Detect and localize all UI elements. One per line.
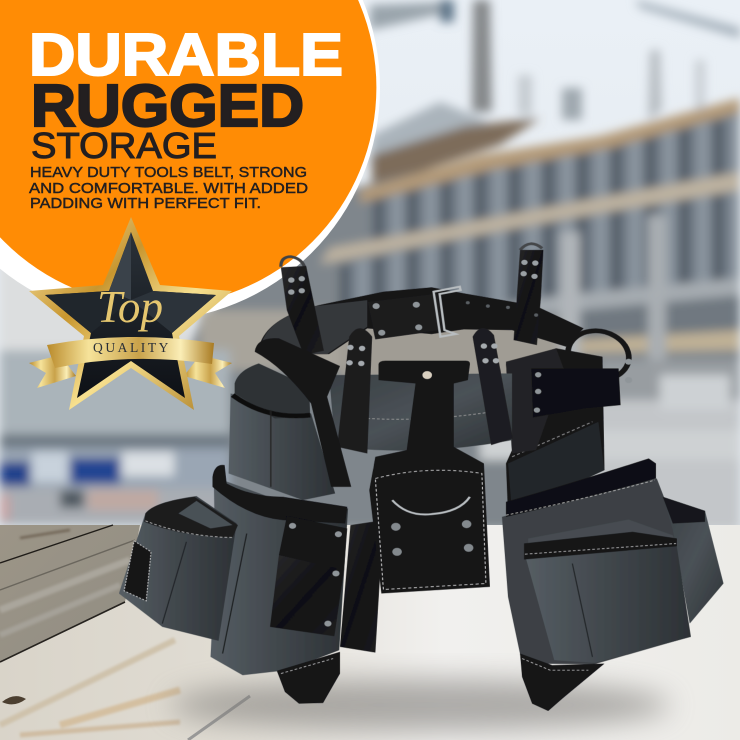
label: quality: QUALITY bbox=[93, 340, 171, 355]
orange circle panel bbox=[0, 0, 376, 306]
building mass bbox=[160, 100, 740, 530]
wooden table bbox=[0, 525, 740, 740]
front belt band bbox=[329, 373, 512, 451]
left lower pouch bbox=[210, 465, 348, 675]
brand label bbox=[124, 541, 151, 601]
center hanger bbox=[369, 361, 490, 594]
description text bbox=[29, 164, 308, 212]
dark star bbox=[45, 232, 216, 398]
title: rugged: RUGGED bbox=[31, 73, 304, 139]
left tip bbox=[277, 652, 340, 704]
right ring bbox=[557, 321, 640, 389]
ribbon band bbox=[47, 337, 214, 368]
dark planks at left bbox=[0, 525, 140, 662]
right tip bbox=[520, 654, 604, 711]
left small tube bbox=[340, 520, 383, 653]
heading block bbox=[29, 22, 343, 212]
shadow under belt bbox=[170, 679, 670, 731]
right lower main pouch bbox=[502, 458, 690, 664]
script: top: Top bbox=[97, 281, 163, 332]
ribbon tails bbox=[29, 355, 76, 388]
windows row 1 bbox=[370, 115, 740, 250]
left upper pouch bbox=[229, 338, 351, 500]
badge: top quality star bbox=[29, 217, 232, 410]
front belt straps bbox=[337, 328, 513, 453]
description text: AND COMFORTABLE. WITH ADDED bbox=[29, 180, 308, 197]
description text: PADDING WITH PERFECT FIT. bbox=[30, 195, 261, 212]
left outer pouch bbox=[119, 496, 238, 641]
gold star bbox=[29, 217, 232, 410]
background: blurred construction site bbox=[0, 0, 740, 530]
buckle patch bbox=[367, 287, 538, 339]
floor bands bbox=[360, 98, 740, 203]
rear belt and padding bbox=[261, 287, 584, 354]
crane tower bbox=[472, 0, 492, 112]
right front pocket bbox=[524, 519, 691, 663]
right upper pouch bbox=[506, 348, 632, 513]
left side pale area and blue hoardings bbox=[0, 260, 190, 360]
white circle rim bbox=[0, 0, 380, 321]
title: durable: DURABLE bbox=[29, 22, 343, 88]
windows row 3 bbox=[560, 295, 740, 340]
left hammer holster bbox=[270, 516, 347, 636]
roof bbox=[370, 102, 490, 168]
ring strap top right bbox=[514, 244, 543, 345]
right side pouch bbox=[663, 497, 723, 624]
ring strap top left bbox=[281, 257, 324, 355]
title: storage: STORAGE bbox=[31, 125, 217, 166]
product: tool belt bbox=[119, 244, 723, 711]
description text: HEAVY DUTY TOOLS BELT, STRONG bbox=[30, 164, 307, 181]
windows row 2 bbox=[340, 190, 740, 320]
